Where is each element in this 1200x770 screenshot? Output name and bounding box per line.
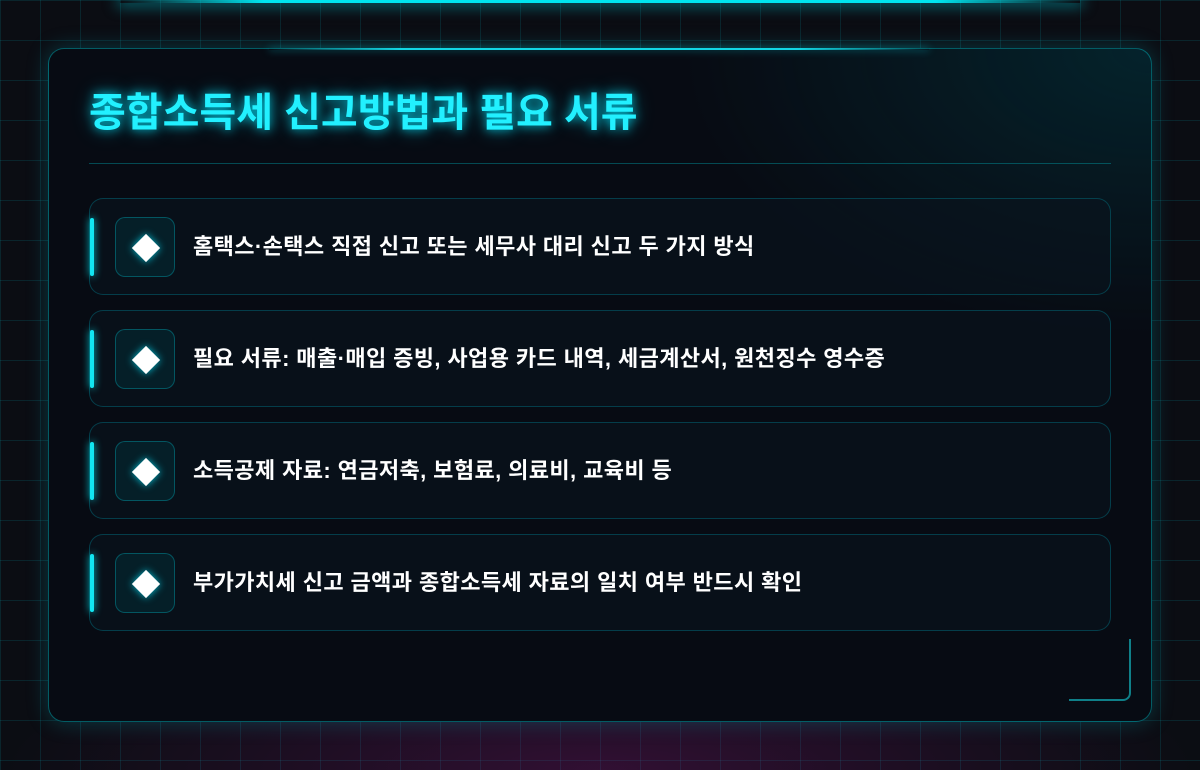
item 4 [89,534,1111,631]
item 1 [89,198,1111,295]
icon: diamond [115,329,175,389]
text 3: 소득공제 자료: 연금저축, 보험료, 의료비, 교육비 등 [193,458,672,483]
text 2: 필요 서류: 매출·매입 증빙, 사업용 카드 내역, 세금계산서, 원천징수 영수증 [193,346,885,371]
corner decoration [1069,639,1131,701]
title: 종합소득세 신고방법과 필요 서류 [89,91,638,135]
text 1: 홈택스·손택스 직접 신고 또는 세무사 대리 신고 두 가지 방식 [193,234,755,259]
text 4: 부가가치세 신고 금액과 종합소득세 자료의 일치 여부 반드시 확인 [193,570,802,595]
icon: diamond [115,217,175,277]
icon: diamond [115,553,175,613]
icon: diamond [115,441,175,501]
item 3 [89,422,1111,519]
item 2 [89,310,1111,407]
